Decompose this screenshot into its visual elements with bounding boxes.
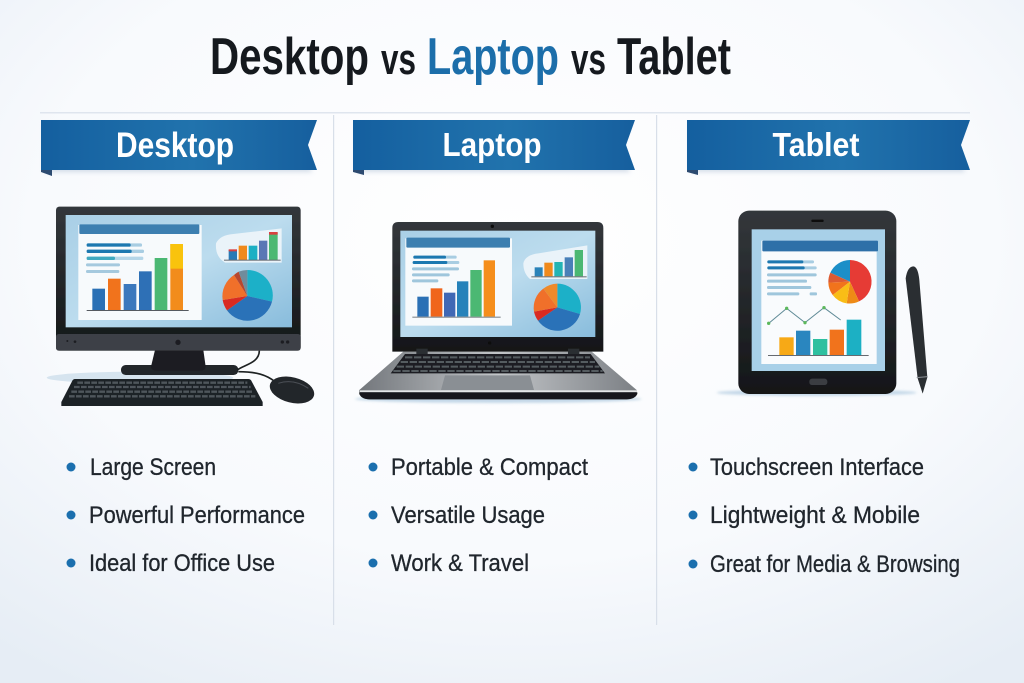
- tablet: [738, 211, 896, 394]
- banner: Desktop: Desktop: [116, 126, 234, 165]
- stylus: [906, 266, 928, 394]
- list: Desktop features: Ideal for Office Use: [89, 550, 275, 577]
- list: Laptop features: Work & Travel: [391, 550, 529, 577]
- list: Desktop features: [66, 454, 305, 577]
- list: Laptop features: Versatile Usage: [391, 502, 545, 529]
- title: vs: [571, 35, 606, 84]
- icon: laptop: [355, 222, 642, 403]
- banner: Laptop: Laptop: [442, 126, 542, 163]
- list: Laptop features: Portable & Compact: [391, 454, 588, 481]
- banner: Desktop: [41, 120, 317, 176]
- monitor: [56, 207, 301, 375]
- banner: Tablet: Tablet: [772, 126, 860, 163]
- list: Desktop features: Large Screen: [90, 454, 216, 481]
- list: Tablet features: [688, 454, 960, 578]
- list: Tablet features: Touchscreen Interface: [710, 454, 924, 481]
- laptop base: [359, 352, 637, 399]
- list: Tablet features: Lightweight & Mobile: [710, 502, 920, 529]
- keyboard: [61, 379, 263, 406]
- list: Desktop features: Powerful Performance: [89, 502, 305, 529]
- title: Desktop: [210, 28, 369, 86]
- title: Laptop: [427, 28, 559, 86]
- list: Tablet features: Great for Media & Browsing: [710, 551, 960, 578]
- icon: tablet and stylus: [717, 211, 928, 396]
- cable: [237, 351, 275, 382]
- title: vs: [381, 35, 416, 84]
- icon: desktop computer: [47, 207, 317, 408]
- mouse: [267, 372, 317, 408]
- banner: Laptop: [353, 120, 635, 175]
- list: Laptop features: [368, 454, 588, 577]
- title: [210, 28, 731, 86]
- laptop lid: [392, 222, 603, 354]
- banner: Tablet: [687, 120, 970, 175]
- title: Tablet: [617, 28, 731, 86]
